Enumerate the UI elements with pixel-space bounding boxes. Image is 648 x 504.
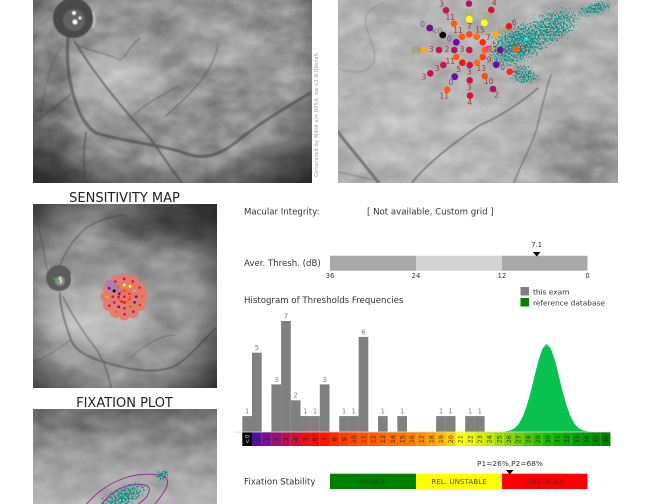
test grid values: 13: [477, 64, 486, 73]
optic disc: [46, 265, 72, 291]
colour scale labels: 2: [272, 437, 280, 441]
test grid values: 2: [445, 45, 450, 54]
gauge: average threshold: 24: [412, 272, 420, 280]
chart: threshold histogram bars: [242, 321, 485, 432]
colour scale labels: 32: [563, 435, 571, 443]
colour scale labels: 5: [302, 437, 310, 441]
colour scale labels: 22: [466, 435, 474, 443]
gauge: average threshold: 0: [585, 272, 590, 280]
gauge: fixation stability: REL. UNSTABLE: [431, 477, 487, 486]
histogram count labels: 1: [448, 408, 453, 416]
panel: fixation plot image: [33, 409, 217, 504]
colour scale labels: 13: [379, 435, 387, 443]
fixation percentages: P1=26%,P2=68%: [477, 459, 543, 468]
gauge: average threshold: 36: [326, 272, 334, 280]
test grid values: 0: [505, 45, 510, 54]
colour scale labels: 17: [418, 435, 426, 443]
histogram count labels: 1: [342, 408, 346, 416]
histogram count labels: [245, 312, 482, 416]
colour scale labels: 18: [428, 435, 436, 443]
colour scale labels: [243, 434, 610, 444]
test grid values: 0: [500, 63, 505, 72]
threshold colour scale: [242, 432, 611, 446]
colour scale labels: 29: [534, 435, 542, 443]
colour scale labels: <0: [243, 434, 251, 444]
test grid values: 6: [512, 18, 517, 27]
colour scale labels: 12: [369, 435, 377, 443]
test grid values: 11: [446, 57, 455, 66]
generator note: Generated by MAIA s/n 0054, sw v2.8.0beta5: [314, 53, 320, 177]
panel: top-left fundus image: [33, 0, 312, 183]
histogram count labels: 2: [293, 392, 298, 400]
histogram count labels: 5: [255, 344, 259, 352]
test grid values: 11: [518, 44, 528, 54]
heading: sensitivity map: SENSITIVITY MAP: [69, 191, 180, 206]
panel: top-right microperimetry image: [338, 0, 618, 183]
histogram count labels: 1: [381, 408, 385, 416]
test grid values: 3: [467, 83, 472, 92]
fixation marker on disc: [53, 278, 60, 281]
sensitivity blob: [100, 273, 148, 320]
colour scale labels: 8: [331, 437, 339, 441]
histogram count labels: 1: [400, 408, 404, 416]
colour scale labels: 24: [486, 435, 494, 443]
test grid values: 23: [483, 12, 492, 20]
colour scale labels: 30: [544, 435, 552, 443]
gauge: fixation stability: [330, 459, 588, 489]
label: fixation stability: Fixation Stability: [244, 478, 315, 488]
colour scale labels: 23: [476, 435, 484, 443]
text block: macular integrity: Macular Integrity:: [244, 208, 320, 218]
legend: this exam: [533, 288, 569, 296]
colour scale labels: 0: [253, 437, 261, 441]
test grid values: 3: [429, 45, 434, 54]
baseline: [235, 432, 611, 433]
histogram count labels: 1: [439, 408, 443, 416]
test grid values: 0: [420, 20, 425, 29]
fixation scatter: [482, 0, 616, 86]
histogram count labels: 3: [323, 376, 327, 384]
test grid values: 7: [467, 22, 472, 31]
gauge: fixation stability: UNSTABLE: [526, 477, 564, 486]
colour scale labels: 11: [360, 435, 368, 443]
test grid values: 11: [446, 13, 455, 22]
histogram count labels: 1: [313, 408, 317, 416]
heading: fixation plot: FIXATION PLOT: [76, 396, 173, 411]
gauge: average threshold: 12: [498, 272, 506, 280]
histogram count labels: 7: [284, 312, 288, 320]
histogram count labels: 1: [478, 408, 482, 416]
test grid values: [412, 0, 528, 107]
colour scale labels: 34: [583, 435, 591, 443]
test grid values: 0: [449, 78, 454, 87]
test grid values: 11: [453, 26, 463, 35]
colour scale labels: 28: [524, 435, 532, 443]
test grid values: 11: [489, 45, 498, 54]
histogram count labels: 1: [468, 408, 472, 416]
optic disc: [53, 0, 94, 38]
retinal vessels: [34, 38, 310, 183]
gauge: fixation stability: STABLE: [360, 477, 387, 486]
test grid values: 19: [412, 46, 421, 55]
colour scale labels: 16: [408, 435, 416, 443]
colour scale labels: 36: [602, 435, 610, 443]
histogram count labels: 1: [303, 408, 307, 416]
colour scale labels: 35: [592, 435, 600, 443]
test grid values: 10: [484, 77, 494, 86]
heading: histogram: Histogram of Thresholds Frequencies: [244, 296, 404, 306]
colour scale labels: 25: [495, 435, 503, 443]
colour scale labels: 15: [398, 435, 406, 443]
histogram count labels: 6: [361, 328, 366, 336]
colour scale labels: 20: [447, 435, 455, 443]
test grid values: 3: [435, 64, 440, 73]
marker: P1 P2: [506, 470, 514, 474]
outer fixation ellipse: [87, 474, 168, 504]
test grid values: 24: [497, 26, 507, 35]
test grid values: 3: [460, 45, 465, 54]
colour scale labels: 14: [389, 435, 397, 443]
test grid values: 2: [494, 90, 499, 100]
test grid values: 11: [440, 92, 449, 100]
test grid values: 15: [475, 26, 485, 34]
marker: 7.1: [533, 252, 540, 256]
test grid values: 0: [447, 34, 452, 44]
label: average threshold: Aver. Thresh. (dB): [244, 259, 321, 269]
colour scale labels: 10: [350, 435, 358, 443]
test grid values: 4: [467, 98, 472, 107]
fixation scatter: [96, 468, 172, 504]
colour scale labels: 26: [505, 435, 513, 443]
retinal vessels: [338, 2, 551, 183]
colour scale labels: 19: [437, 435, 445, 443]
test grid values: 7: [514, 70, 519, 79]
retinal vessels: [33, 210, 216, 388]
legend: reference database: [533, 298, 605, 307]
colour scale labels: 6: [311, 437, 319, 441]
test grid values: <0: [431, 26, 442, 36]
histogram count labels: 1: [352, 408, 356, 416]
test grid values: 9: [487, 56, 492, 64]
test grid values: 22: [465, 8, 474, 17]
histogram count labels: 3: [274, 376, 278, 384]
test grid values: 3: [422, 72, 427, 82]
sensitivity map dots: [106, 278, 143, 316]
panel: sensitivity map image: [33, 204, 225, 388]
inner fixation ellipse: [102, 484, 149, 504]
colour scale labels: 4: [292, 437, 300, 441]
colour scale labels: 27: [515, 435, 523, 443]
colour scale labels: 3: [282, 437, 290, 441]
test grid values: 7: [486, 33, 491, 42]
colour scale labels: 21: [457, 435, 465, 443]
test grid values: 5: [456, 65, 461, 74]
test grid values: 3: [467, 68, 472, 76]
gauge: average threshold: 7.1: [531, 241, 542, 249]
colour scale labels: 1: [263, 437, 271, 441]
colour scale labels: 33: [573, 435, 581, 443]
gauge: average threshold: [326, 241, 590, 280]
colour scale labels: 9: [340, 437, 348, 441]
legend: [520, 287, 605, 307]
colour scale labels: 7: [321, 437, 329, 441]
text block: macular integrity: [244, 208, 494, 218]
test grid dots: [421, 0, 528, 99]
colour scale labels: 31: [554, 435, 562, 443]
chart: reference distribution curve: [501, 344, 593, 432]
histogram count labels: 1: [245, 408, 249, 416]
text block: macular integrity: [ Not available, Custom grid ]: [367, 208, 494, 218]
